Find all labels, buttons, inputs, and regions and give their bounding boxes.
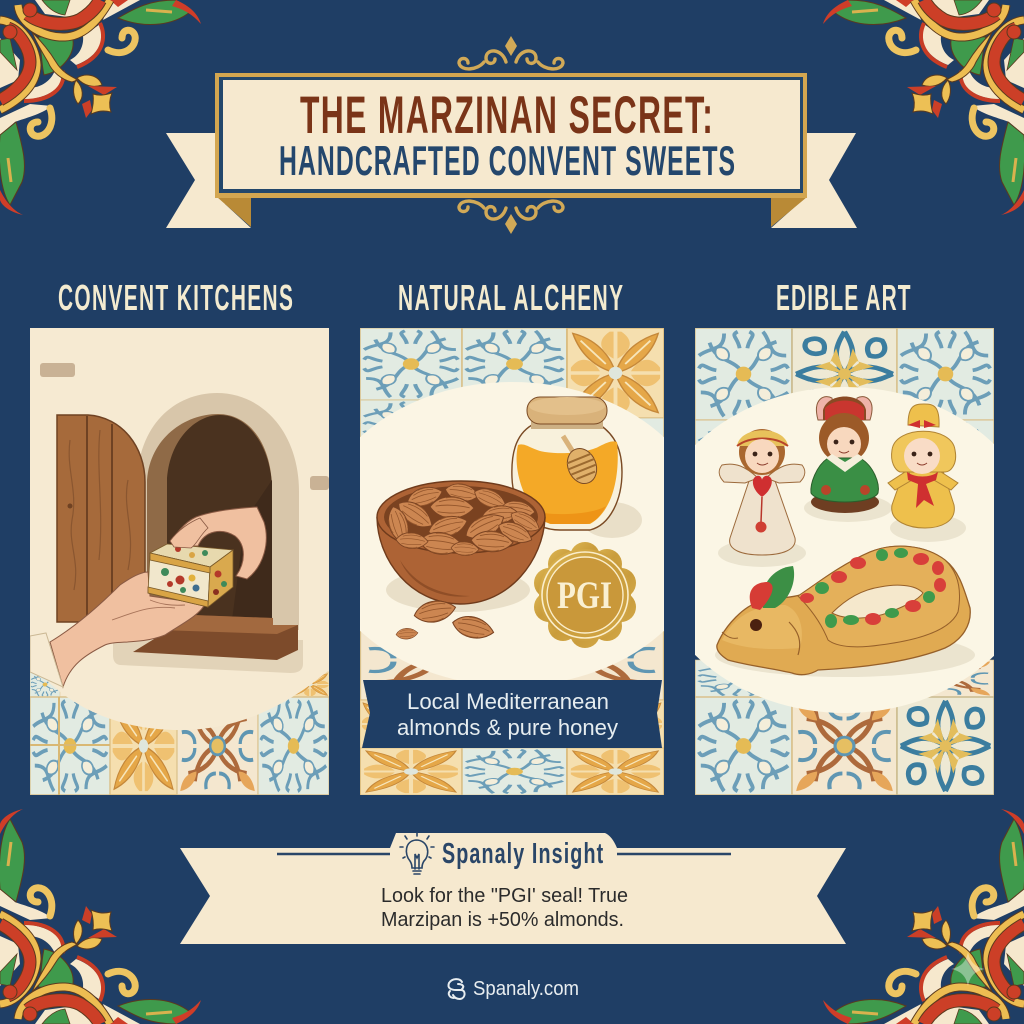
heading: natural alcheny: NATURAL ALCHENY [398, 278, 623, 319]
PGI seal [534, 542, 636, 648]
lower hand [50, 572, 205, 687]
bowl shadow [386, 577, 530, 612]
footer logo [448, 978, 579, 1000]
insight banner [180, 833, 846, 944]
panel: edible art [695, 328, 994, 795]
fish-shaped marzipan cake [717, 546, 970, 675]
ribbon tails [166, 133, 857, 228]
candied fruit [800, 548, 946, 628]
cream oval [695, 387, 994, 713]
insight ribbon [180, 833, 846, 944]
cream oval [360, 382, 664, 680]
tile background [695, 328, 994, 795]
loose almonds [396, 600, 494, 640]
figure: green child [811, 396, 879, 513]
insight text: Marzipan is +50% almonds. [381, 908, 624, 931]
ornamental flourish: top [459, 36, 563, 69]
tile background [360, 328, 664, 795]
upper hand fingers over box [170, 518, 208, 548]
corner ornament: top left [0, 0, 201, 215]
divider lines [277, 853, 731, 855]
tile border strip [30, 672, 329, 795]
panel: convent kitchens [30, 328, 330, 795]
almonds in bowl [385, 481, 543, 557]
window arch [137, 393, 299, 630]
almond bowl [377, 481, 545, 604]
title banner [166, 36, 857, 234]
caption banner [362, 680, 662, 748]
fin decoration [750, 566, 794, 610]
sleeve [30, 633, 63, 687]
figure shadows [715, 494, 975, 677]
heading: convent kitchens: CONVENT KITCHENS [58, 278, 293, 319]
insight text: Look for the "PGI' seal! True [381, 884, 628, 907]
figure: yellow child [888, 404, 958, 528]
icon: lightbulb [400, 833, 434, 874]
window sill [133, 615, 298, 660]
ornamental flourish: bottom [459, 201, 563, 234]
PGI seal: PGI [557, 574, 612, 617]
caption banner: almonds & pure honey [397, 715, 618, 740]
heading: edible art: EDIBLE ART [776, 278, 911, 319]
icon: link logo [448, 979, 465, 999]
wall bricks [40, 363, 329, 490]
figure: angel [719, 429, 805, 555]
insight heading: Spanaly Insight [442, 838, 603, 870]
corner ornament: bottom left [0, 809, 201, 1024]
insight text [381, 884, 628, 931]
caption banner: Local Mediterranean [407, 689, 609, 714]
corner ornament: top right [823, 0, 1024, 215]
site name: Spanaly.com [473, 978, 579, 1000]
decorated sweets box [148, 544, 233, 607]
upper hand [172, 507, 266, 579]
watermark sparkle [951, 952, 985, 986]
title frame [215, 73, 807, 198]
wooden shutter [57, 415, 145, 622]
title line one: THE MARZINAN SECRET: [300, 86, 713, 145]
jar shadow [588, 502, 642, 538]
honey dipper [561, 434, 598, 484]
panel: natural alchemy [360, 328, 664, 795]
corner ornament: bottom right [823, 809, 1024, 1024]
honey jar [512, 397, 622, 530]
sill shadow [113, 640, 303, 673]
title line two: HANDCRAFTED CONVENT SWEETS [279, 138, 735, 185]
